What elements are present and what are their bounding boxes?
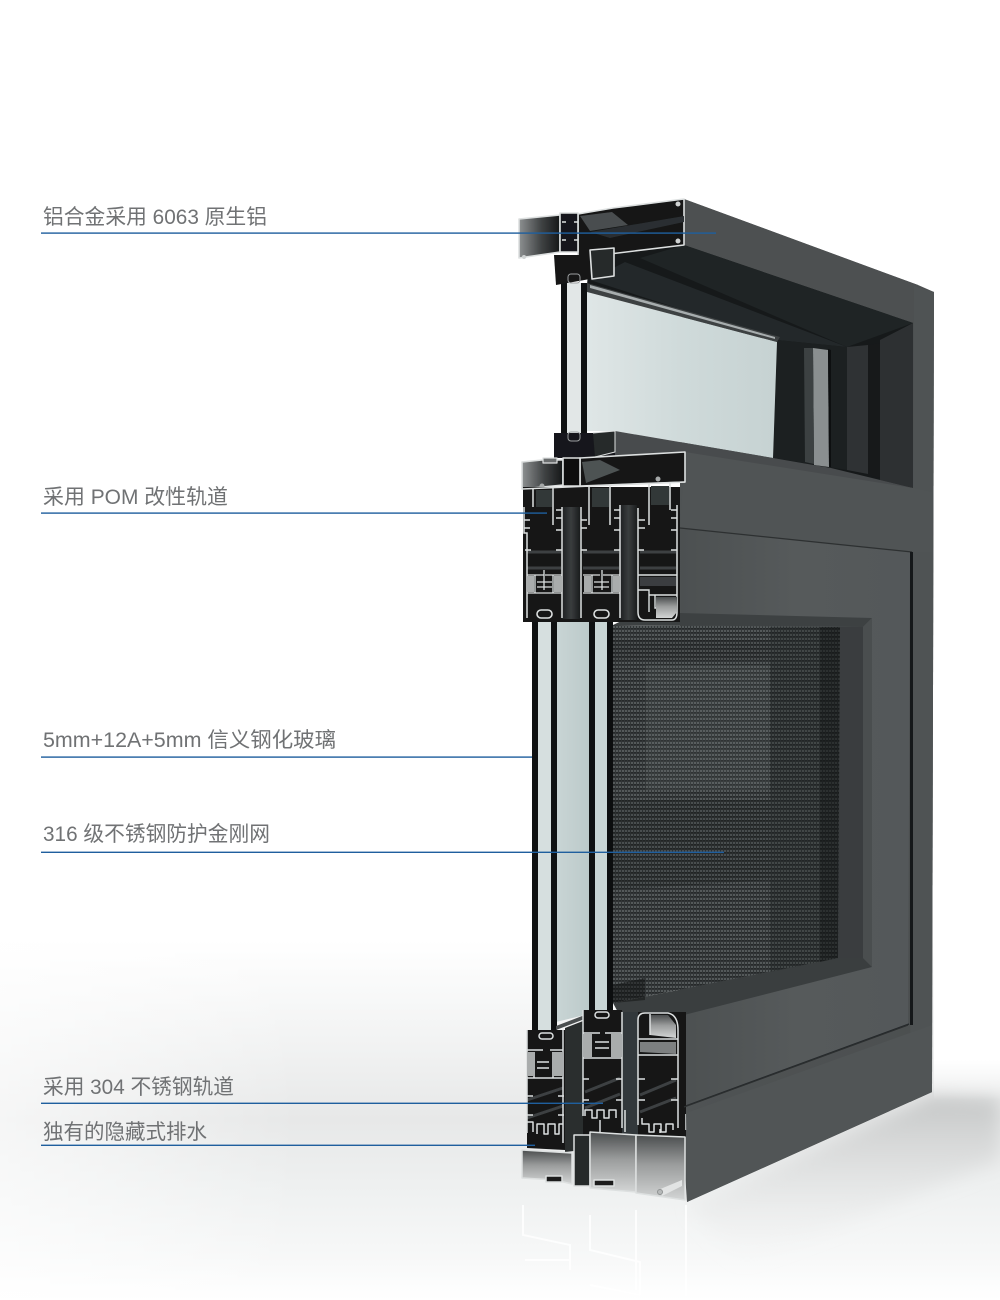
sill right box 1	[590, 1132, 636, 1192]
middle block	[581, 505, 620, 618]
left block	[524, 507, 562, 618]
upper band highlight	[684, 199, 918, 323]
callout line	[41, 1145, 535, 1146]
right frame strip	[910, 286, 934, 1102]
sill right block	[650, 1015, 676, 1038]
panel shadow line	[910, 552, 913, 1025]
transom thermal break	[563, 458, 580, 486]
window assembly	[519, 199, 934, 1202]
head profile section	[519, 199, 684, 285]
callout line	[41, 1103, 603, 1104]
opening underlay	[587, 245, 913, 488]
transom profile section	[522, 431, 685, 489]
head left box	[519, 215, 560, 258]
callout text: 316 级不锈钢防护金刚网	[43, 823, 270, 846]
right block	[638, 505, 677, 620]
sill profile section	[522, 1010, 686, 1200]
bottom reveal	[613, 958, 872, 1016]
lower head sash	[554, 433, 615, 458]
callout line	[41, 852, 724, 853]
callout line	[41, 756, 532, 758]
lower sill wedge	[612, 431, 913, 530]
callout text: 独有的隐藏式排水	[43, 1121, 207, 1144]
wall white above floor at right	[934, 940, 1000, 1100]
insect mesh	[613, 625, 840, 1003]
floor reflection	[523, 1205, 686, 1296]
opening soffit	[640, 245, 913, 347]
sill left block	[527, 1030, 564, 1143]
callout line	[41, 232, 716, 234]
section dividers	[533, 482, 670, 525]
callout text: 采用 POM 改性轨道	[43, 486, 228, 509]
floor shadow	[690, 1095, 1000, 1265]
sill dark fill	[527, 1030, 565, 1150]
sill right box 2	[636, 1135, 685, 1200]
lower panel	[680, 528, 910, 1107]
upper glass	[587, 292, 777, 458]
sill center channel	[574, 1135, 590, 1186]
transom face	[680, 452, 932, 552]
lower sill face	[686, 1025, 932, 1202]
transom left box	[522, 460, 563, 489]
callout text: 采用 304 不锈钢轨道	[43, 1076, 234, 1099]
head thermal break	[560, 213, 578, 252]
lower glazing	[532, 618, 613, 1030]
side reveal	[838, 627, 863, 958]
floor side fade	[0, 940, 300, 1300]
head right box	[578, 199, 684, 258]
transom right box	[580, 452, 685, 486]
glass top bead	[587, 283, 780, 342]
sill left base	[522, 1150, 572, 1184]
interior streaks	[527, 1078, 676, 1118]
dark columns	[523, 487, 680, 622]
callout line	[41, 512, 547, 514]
interior streaks	[527, 552, 676, 568]
callout text: 铝合金采用 6063 原生铝	[43, 206, 267, 229]
top reveal	[613, 612, 872, 627]
section top line	[522, 482, 685, 489]
upper double glazing	[567, 283, 581, 433]
main frame face	[680, 199, 934, 1202]
sill middle block	[583, 1010, 625, 1134]
upper sliding sections	[522, 482, 685, 622]
callout text: 5mm+12A+5mm 信义钢化玻璃	[43, 729, 336, 752]
silver slot	[813, 348, 829, 467]
head sash	[554, 255, 590, 285]
opening jamb	[773, 340, 847, 470]
lower opening	[613, 612, 872, 1016]
upper opening	[561, 245, 913, 530]
